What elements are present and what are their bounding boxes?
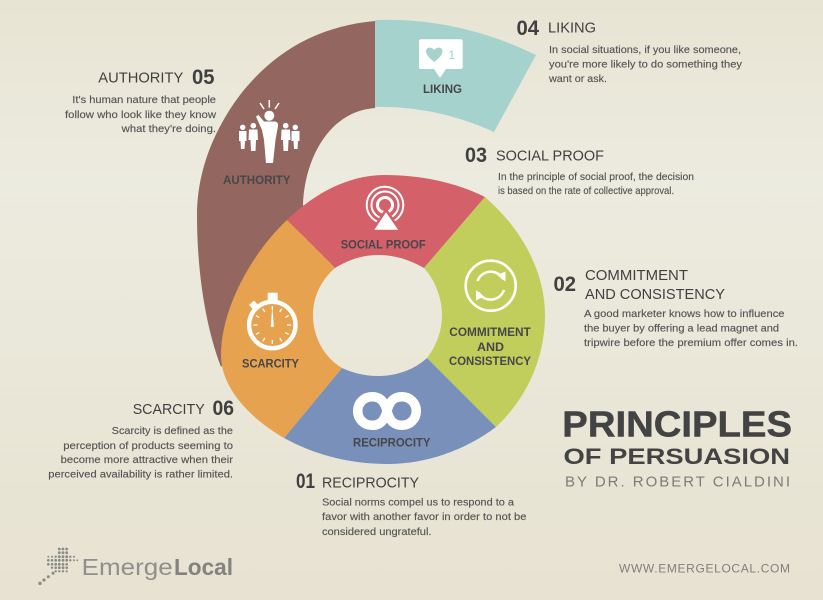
label: authority: AUTHORITY (223, 175, 291, 187)
text block: 06 scarcity: perception of products seeming to (63, 440, 233, 452)
logo wordmark: Emerge (82, 554, 173, 580)
text block: 04 liking (516, 17, 743, 85)
text block: 02 commitment and consistency: AND CONSISTENCY (585, 286, 725, 303)
text block: 01 reciprocity: 01 (296, 470, 315, 493)
text block: 03 social proof: SOCIAL PROOF (496, 148, 604, 165)
text block: 03 social proof: In the principle of social proof, the decision (498, 171, 694, 183)
label: scarcity: SCARCITY (242, 358, 299, 370)
icon: infinity (358, 397, 416, 425)
title: PRINCIPLES (562, 404, 792, 445)
panel: commitment and consistency segment (424, 197, 545, 427)
text block: 02 commitment and consistency: 02 (554, 273, 576, 296)
text block: 06 scarcity: Scarcity is defined as the (112, 425, 233, 437)
text block: 05 authority (65, 66, 216, 135)
text block: 05 authority: follow who look like they know (65, 109, 216, 121)
label: commitment and consistency: CONSISTENCY (449, 356, 531, 368)
icon: broadcast signal (367, 187, 403, 231)
text block: 06 scarcity: perceived availability is rather limited. (48, 469, 233, 481)
icon: refresh arrows (466, 261, 516, 311)
website url: WWW.EMERGELOCAL.COM (619, 562, 790, 576)
text block: 01 reciprocity: considered ungrateful. (322, 526, 432, 538)
text block: 03 social proof: is based on the rate of collective approval. (498, 185, 674, 197)
label: commitment and consistency (449, 327, 531, 368)
text block: 05 authority: 05 (192, 66, 215, 89)
text block: 02 commitment and consistency: COMMITMENT (585, 267, 688, 284)
text block: 05 authority: what they're doing. (121, 123, 216, 135)
text block: 05 authority: It's human nature that people (72, 94, 216, 106)
text block: 06 scarcity: become more attractive when their (61, 454, 234, 466)
text block: 05 authority: AUTHORITY (98, 70, 183, 87)
text block: 01 reciprocity: favor with another favor in order to not be (322, 511, 527, 523)
panel: authority segment (197, 21, 375, 367)
logo: EmergeLocal (38, 548, 233, 585)
text block: 03 social proof (465, 144, 694, 197)
text block: 02 commitment and consistency: A good marketer knows how to influence (584, 308, 785, 320)
text block: 04 liking: LIKING (548, 20, 596, 37)
title (562, 404, 792, 491)
icon: like notification: 1 (448, 48, 456, 62)
text block: 01 reciprocity: Social norms compel us to respond to a (322, 497, 514, 509)
text block: 06 scarcity (48, 397, 234, 481)
panel: social proof segment (287, 175, 485, 268)
label: reciprocity: RECIPROCITY (353, 438, 431, 450)
text block: 02 commitment and consistency: the buyer by offering a lead magnet and (584, 323, 779, 335)
text block: 06 scarcity: 06 (212, 397, 234, 420)
label: commitment and consistency: COMMITMENT (449, 327, 531, 339)
text block: 03 social proof: 03 (465, 144, 487, 167)
panel: liking segment (375, 20, 536, 132)
panel: reciprocity segment (284, 358, 496, 464)
panel: scarcity segment (221, 220, 342, 438)
logo: EmergeLocal: Local (174, 554, 233, 580)
icon: dotted runner mark (38, 548, 78, 585)
text block: 01 reciprocity (296, 470, 527, 538)
text block: 02 commitment and consistency (554, 267, 798, 349)
text block: 04 liking: In social situations, if you like someone, (549, 44, 741, 56)
text block: 01 reciprocity: RECIPROCITY (322, 475, 419, 492)
title: BY DR. ROBERT CIALDINI (565, 474, 790, 491)
label: social proof: SOCIAL PROOF (341, 240, 426, 252)
icon: stopwatch (249, 293, 296, 348)
text block: 04 liking: you're more likely to do something they (549, 59, 743, 71)
icon: like notification (419, 39, 463, 78)
text block: 04 liking: want or ask. (548, 73, 607, 85)
icon: authority crowd (239, 100, 300, 163)
text block: 04 liking: 04 (516, 17, 539, 40)
label: liking: LIKING (423, 84, 462, 96)
label: commitment and consistency: AND (477, 342, 504, 354)
title: OF PERSUASION (564, 444, 790, 469)
text block: 02 commitment and consistency: tripwire before the premium offer comes in. (584, 337, 798, 349)
text block: 06 scarcity: SCARCITY (133, 401, 205, 418)
